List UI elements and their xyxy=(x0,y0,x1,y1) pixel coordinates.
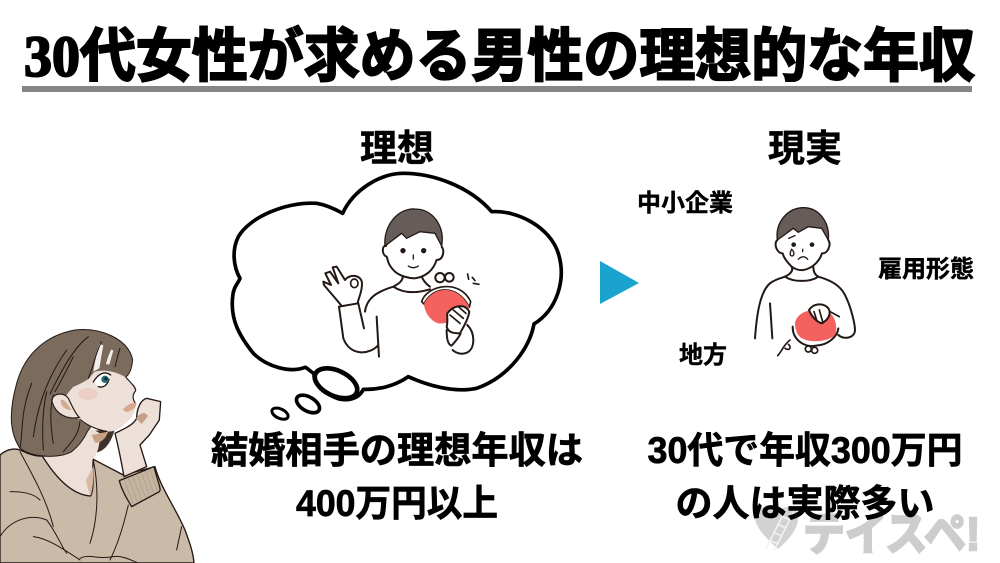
text: 30s annual income: 30代で年収300万円 xyxy=(648,430,962,471)
label: region: 地方 xyxy=(679,342,727,369)
text: many people: の人は実際多い xyxy=(676,483,934,524)
text: 4 million yen or more: 400万円以上 xyxy=(296,483,498,524)
heading: reality: 現実 xyxy=(768,128,842,169)
arrow xyxy=(600,261,639,304)
title underline xyxy=(22,86,972,92)
icon: man with purse, happy xyxy=(323,209,479,357)
heading: ideal: 理想 xyxy=(360,128,434,169)
illustration: thinking woman xyxy=(0,330,194,563)
label: small company: 中小企業 xyxy=(637,190,733,217)
title: 30代女性が求める男性の理想的な年収 xyxy=(24,24,975,89)
thought bubble with man xyxy=(232,173,561,422)
icon: man with purse, sad xyxy=(755,208,855,356)
label: employment type: 雇用形態 xyxy=(878,256,974,283)
watermark: logo: テイスペ! xyxy=(803,508,980,560)
text: ideal income: 結婚相手の理想年収は xyxy=(211,430,583,471)
